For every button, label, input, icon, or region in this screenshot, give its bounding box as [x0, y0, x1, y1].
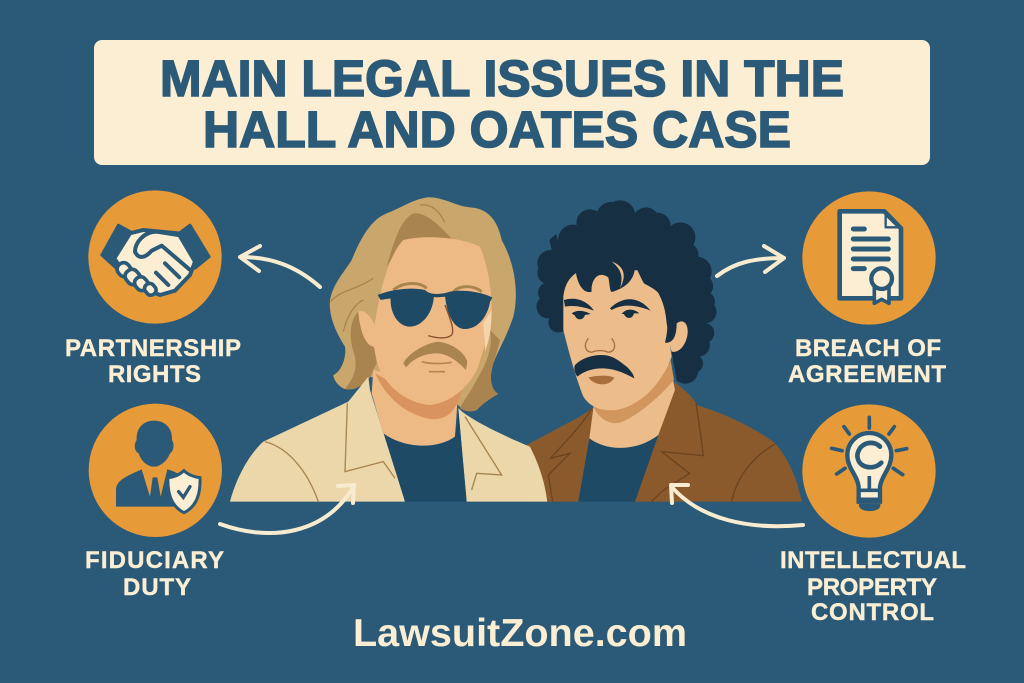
moustache [403, 342, 467, 370]
arrow: to breach of agreement [717, 246, 784, 276]
brows and eyes [564, 299, 651, 311]
label: CONTROL [811, 599, 934, 626]
label: PROPERTY [807, 574, 937, 601]
shirt [578, 435, 658, 502]
jacket [527, 382, 802, 502]
title [94, 40, 930, 165]
label: RIGHTS [108, 361, 201, 388]
panel: breach of agreement [788, 191, 946, 388]
icon: person with shield [89, 404, 222, 537]
neck [372, 370, 458, 446]
icon: light bulb with copyright sign [802, 404, 936, 538]
label: INTELLECTUAL [780, 547, 966, 574]
label: FIDUCIARY [85, 547, 224, 574]
label: PARTNERSHIP [65, 335, 241, 362]
jacket lines [265, 403, 502, 502]
icon: handshake [88, 190, 222, 324]
arrow: to partnership rights [240, 246, 320, 287]
mouth [588, 376, 614, 384]
footer: website name: LawsuitZone.com [353, 612, 687, 655]
nose [585, 338, 615, 352]
nose [428, 305, 453, 338]
title: MAIN LEGAL ISSUES IN THE [160, 50, 844, 107]
curly hair [536, 200, 717, 384]
label: DUTY [123, 574, 191, 601]
arrow: from intellectual property control [671, 485, 803, 526]
curly fringe [570, 240, 677, 305]
panel: intellectual property control [780, 404, 966, 626]
label: BREACH OF [795, 335, 941, 362]
face [563, 270, 672, 410]
label: AGREEMENT [788, 361, 946, 388]
panel: fiduciary duty [85, 404, 224, 601]
ear [358, 311, 377, 347]
sunglasses [378, 289, 492, 329]
moustache [574, 355, 634, 378]
label [65, 335, 241, 388]
portrait: man with dark curly hair and brown jacket [527, 200, 802, 502]
label [780, 547, 966, 626]
jacket [230, 377, 547, 502]
arrow: from fiduciary duty [220, 485, 354, 533]
neck [589, 363, 675, 448]
portrait: man with blond hair, sunglasses and cream jacket [230, 197, 547, 502]
ear [667, 321, 688, 352]
label [788, 335, 946, 388]
title: HALL AND OATES CASE [203, 101, 791, 158]
label [85, 547, 224, 601]
icon: contract with seal [802, 191, 936, 325]
face [373, 237, 492, 405]
mouth [422, 362, 452, 372]
hair [330, 197, 516, 411]
brows [393, 284, 482, 292]
shirt [370, 390, 467, 502]
panel: partnership rights [65, 190, 241, 388]
